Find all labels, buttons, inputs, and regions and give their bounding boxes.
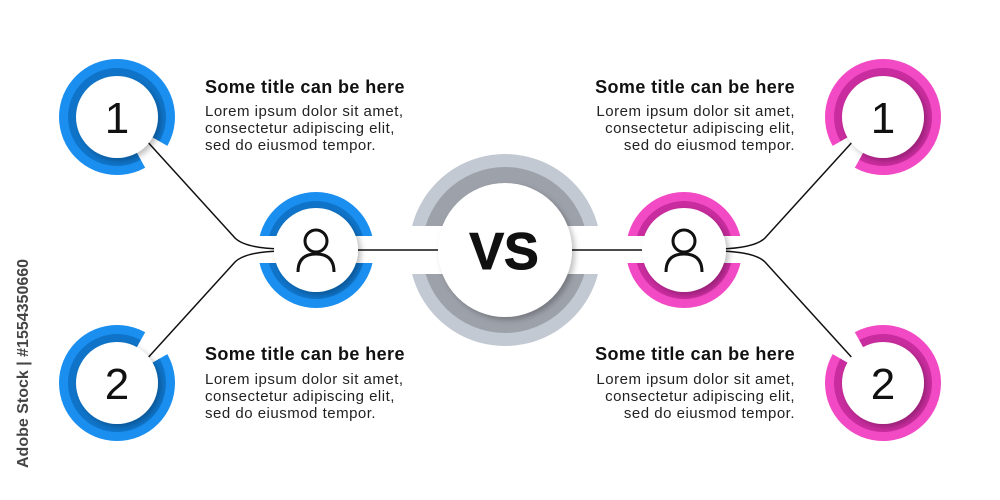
ring: left 2 [59, 320, 178, 441]
text: right bottom: Lorem ipsum dolor sit amet, [596, 371, 795, 388]
text: right bottom: sed do eiusmod tempor. [624, 405, 795, 422]
VS disc: VS [469, 223, 539, 281]
text: left top: consectetur adipiscing elit, [205, 120, 395, 137]
white disc: right 2 [842, 342, 924, 424]
white disc: right 1 [842, 76, 924, 158]
white disc: left 2 [76, 342, 158, 424]
white disc: right 1: 1 [871, 94, 895, 143]
text: left bottom: consectetur adipiscing elit, [205, 388, 395, 405]
connector lines [135, 128, 865, 372]
text: right bottom [595, 344, 795, 422]
watermark: Adobe Stock | #1554350660 [15, 259, 32, 468]
text: right top: Some title can be here [595, 77, 795, 97]
text: left top [205, 77, 405, 154]
ring: right 2 [822, 320, 941, 441]
text: left top: Lorem ipsum dolor sit amet, [205, 103, 404, 120]
icon: person [298, 230, 334, 272]
icon: person [666, 230, 702, 272]
text: left top: Some title can be here [205, 77, 405, 97]
white disc: left 2: 2 [105, 360, 129, 409]
ring: person right [623, 192, 745, 308]
text: right top: sed do eiusmod tempor. [624, 137, 795, 154]
text: right top: consectetur adipiscing elit, [605, 120, 795, 137]
text: right top: Lorem ipsum dolor sit amet, [596, 103, 795, 120]
text: left bottom: sed do eiusmod tempor. [205, 405, 376, 422]
person disc right [642, 208, 726, 292]
text: right top [595, 77, 795, 154]
text: left bottom: Some title can be here [205, 344, 405, 364]
text: left bottom: Lorem ipsum dolor sit amet, [205, 371, 404, 388]
white disc: left 1: 1 [105, 94, 129, 143]
text: left top: sed do eiusmod tempor. [205, 137, 376, 154]
ring: VS [405, 154, 605, 346]
VS disc [438, 183, 572, 317]
white disc: right 2: 2 [871, 360, 895, 409]
ring: person left [255, 192, 377, 308]
ring: right 1 [822, 59, 941, 180]
person disc left [274, 208, 358, 292]
white disc: left 1 [76, 76, 158, 158]
text: right bottom: Some title can be here [595, 344, 795, 364]
ring: left 1 [59, 59, 178, 180]
text: left bottom [205, 344, 405, 422]
text: right bottom: consectetur adipiscing elit, [605, 388, 795, 405]
